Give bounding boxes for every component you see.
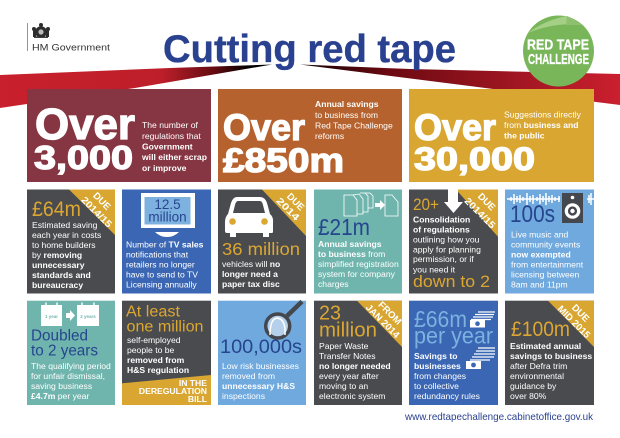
panel: over £850m savings — [218, 89, 402, 182]
icon: television: 12.5 — [154, 197, 181, 212]
panel: 12.5 million TV sales: Licensing annually — [126, 280, 197, 290]
panel: £64m home builders: bureaucracy — [32, 280, 83, 290]
panel: at least one million: people to be — [127, 345, 175, 355]
panel: £66m per year redundancy: businesses — [414, 361, 461, 371]
panel: over 3,000 regulations: will either scrap — [141, 152, 207, 162]
panel: 20+ consolidation of regulations: permission, or if — [413, 254, 474, 264]
panel: £66m per year redundancy: £66m — [414, 306, 467, 332]
panel: 100,000s low risk businesses: inspections — [222, 391, 265, 401]
badge: Red Tape Challenge: RED TAPE — [527, 36, 589, 54]
website URL: www.redtapechallenge.cabinetoffice.gov.uk — [404, 412, 594, 423]
panel: at least one million: removed from — [127, 355, 185, 365]
panel: £100m Defra guidance: guidance by — [510, 381, 557, 391]
icon: documents and arrow — [344, 193, 398, 216]
panel: 100s live music: 8am and 11pm — [511, 280, 568, 290]
panel: 23 million waste transfer notes: moving to an — [319, 381, 368, 391]
panel: over 3,000 regulations: Government — [142, 142, 193, 152]
panel: £64m home builders: £64m — [32, 198, 81, 221]
icon: down arrow — [444, 190, 463, 213]
panel: £100m Defra guidance: savings to business — [510, 351, 592, 361]
panel: 12.5 million TV sales: have to send to TV — [126, 270, 198, 280]
panel: doubled to 2 years — [27, 301, 115, 405]
panel: £100m Defra guidance: DUE — [569, 303, 592, 325]
panel: 36 million vehicles: paper tax disc — [222, 279, 280, 289]
panel: 12.5 million TV sales: Number of TV sales — [126, 240, 204, 250]
panel: 12.5 million TV sales: notifications that — [126, 250, 189, 260]
panel: £64m home builders: 2014/15 — [78, 195, 114, 231]
panel: £66m per year redundancy: per year — [414, 322, 493, 348]
panel: 20+ consolidation of regulations: DUE — [475, 191, 498, 214]
panel: £64m home builders: by removing — [32, 250, 82, 260]
panel: £64m home builders: each year in costs — [32, 230, 101, 240]
panel: 100s live music: 100s — [510, 201, 555, 228]
panel: over £850m savings: Over — [223, 107, 305, 148]
panel: 23 million waste transfer notes: JAN 2014 — [363, 302, 402, 341]
panel: over 3,000 regulations: The number of — [142, 120, 199, 130]
panel: 20+ consolidation of regulations: of regulations — [413, 224, 470, 234]
icon: television — [141, 193, 195, 237]
panel: at least one million: one million — [126, 319, 204, 336]
panel: at least one million: IN THE — [179, 378, 207, 388]
panel: over £850m savings: to business from — [315, 110, 378, 120]
panel: over 3,000 regulations: Over — [35, 100, 135, 149]
panel: £66m per year redundancy: Savings to — [414, 351, 457, 361]
panel: £21m registration: charges — [318, 279, 349, 289]
panel: over 30,000 suggestions: 30,000 — [414, 141, 535, 177]
HM Government logo: HM Government — [32, 42, 110, 52]
panel: doubled to 2 years: Doubled — [31, 328, 88, 345]
title: Cutting red tape — [163, 28, 456, 71]
panel: 23 million waste transfer notes: electronic system — [319, 391, 385, 401]
panel: over 30,000 suggestions — [409, 89, 594, 182]
panel: 20+ consolidation of regulations: apply for planning — [413, 244, 481, 254]
panel: over £850m savings: £850m — [223, 142, 344, 180]
panel: 23 million waste transfer notes: every year after — [319, 371, 379, 381]
panel: over £850m savings: reforms — [315, 131, 344, 141]
panel: 20+ consolidation of regulations: you need it — [413, 264, 456, 274]
panel: £64m home builders: unnecessary — [32, 260, 85, 270]
panel: over £850m savings: Red Tape Challenge — [315, 120, 393, 130]
panel: £100m Defra guidance — [505, 301, 594, 405]
panel: 23 million waste transfer notes — [314, 300, 403, 405]
panel: 100s live music: now exempted — [511, 250, 571, 260]
panel: at least one million: BILL — [188, 394, 207, 404]
HM Government logo — [27, 23, 110, 52]
panel: 20+ consolidation of regulations: down to 2 — [413, 272, 490, 291]
panel: over 30,000 suggestions: Suggestions directly — [504, 110, 582, 120]
badge: Red Tape Challenge — [523, 16, 594, 86]
icon: banknotes lower — [466, 348, 495, 369]
panel: 100,000s low risk businesses: unnecessary H&S — [222, 381, 295, 391]
panel: over 30,000 suggestions: the public — [504, 130, 545, 140]
icon: calendars and arrow: 2 years — [80, 314, 96, 319]
panel: 23 million waste transfer notes: no longer needed — [319, 361, 391, 371]
icon: calendars and arrow: 1 year — [45, 314, 58, 319]
panel: £100m Defra guidance: after Defra trim — [510, 361, 567, 371]
panel: £21m registration: simplified registration — [318, 259, 399, 269]
panel: over 30,000 suggestions: from business and — [504, 120, 578, 130]
panel: 36 million vehicles: DUE — [284, 191, 307, 214]
panel: £100m Defra guidance: Estimated annual — [510, 341, 581, 351]
panel: £64m home builders: DUE — [90, 191, 113, 213]
panel: over 3,000 regulations: 3,000 — [34, 139, 133, 176]
icon: magnifying glass — [266, 302, 302, 338]
panel: 23 million waste transfer notes: Transfer Notes — [319, 351, 376, 361]
panel: 100s live music: community events — [511, 240, 580, 250]
panel: 100,000s low risk businesses: removed from — [222, 371, 275, 381]
panel: £66m per year redundancy: to collective — [414, 381, 459, 391]
panel: over 3,000 regulations: regulations that — [142, 131, 201, 141]
icon: calendars and arrow — [41, 302, 99, 326]
panel: £64m home builders — [27, 190, 115, 294]
panel: 36 million vehicles — [218, 190, 307, 294]
panel: at least one million: self-employed — [127, 335, 181, 345]
panel: doubled to 2 years: to 2 years — [31, 343, 98, 360]
panel: £100m Defra guidance: £100m — [511, 318, 570, 341]
panel: over £850m savings: Annual savings — [315, 99, 379, 109]
panel: 20+ consolidation of regulations: 2014/15 — [462, 196, 498, 232]
panel: 36 million vehicles: 2014 — [274, 196, 302, 224]
panel: 20+ consolidation of regulations: outlining how you — [413, 234, 480, 244]
panel: £66m per year redundancy: redundancy rules — [414, 391, 480, 401]
panel: 20+ consolidation of regulations: 20+ — [413, 196, 439, 214]
panel: 20+ consolidation of regulations: Consolidation — [413, 214, 470, 224]
badge: Red Tape Challenge: CHALLENGE — [528, 51, 589, 68]
panel: £66m per year redundancy — [409, 301, 498, 405]
panel: 20+ consolidation of regulations — [409, 190, 498, 294]
panel: £21m registration — [314, 190, 402, 294]
icon: royal crest — [32, 23, 50, 38]
panel: at least one million: At least — [126, 304, 181, 321]
panel: £100m Defra guidance: MID 2015 — [555, 304, 592, 341]
panel: 100s live music: from entertainment — [511, 260, 584, 270]
panel: £64m home builders: standards and — [32, 270, 91, 280]
panel: doubled to 2 years: £4.7m per year — [31, 391, 89, 401]
panel: £21m registration: system for company — [318, 269, 396, 279]
icon: sound wave — [507, 193, 594, 205]
panel: 100,000s low risk businesses: 100,000s — [220, 336, 302, 358]
panel: over 3,000 regulations: or improve — [142, 163, 187, 173]
panel: 36 million vehicles: longer need a — [222, 269, 278, 279]
panel: 23 million waste transfer notes: million — [319, 320, 377, 342]
panel: at least one million: DEREGULATION — [139, 386, 207, 396]
panel: 100s live music — [505, 190, 594, 294]
icon: television: million — [148, 210, 187, 224]
panel: 23 million waste transfer notes: 23 — [319, 302, 341, 324]
icon: banknotes upper — [470, 312, 495, 328]
icon: speaker — [562, 193, 583, 223]
panel: £21m registration: to business from — [318, 249, 385, 259]
red tape ribbon — [0, 64, 620, 108]
panel: 23 million waste transfer notes: Paper Waste — [319, 341, 369, 351]
panel: at least one million: H&S regulation — [127, 365, 189, 375]
panel: 36 million vehicles: 36 million — [222, 239, 300, 259]
panel: 23 million waste transfer notes: FROM — [376, 300, 403, 327]
panel: over 3,000 regulations — [27, 89, 211, 182]
icon: car — [225, 197, 273, 237]
panel: 100,000s low risk businesses: Low risk businesses — [222, 361, 299, 371]
panel: at least one million — [122, 301, 211, 405]
panel: £100m Defra guidance: environmental — [510, 371, 564, 381]
panel: £21m registration: £21m — [318, 214, 370, 240]
panel: doubled to 2 years: for unfair dismissal, — [31, 371, 105, 381]
panel: doubled to 2 years: saving business — [31, 381, 92, 391]
panel: 100s live music: licensing between — [511, 270, 580, 280]
panel: £66m per year redundancy: from changes — [414, 371, 466, 381]
panel: 100,000s low risk businesses — [218, 301, 306, 405]
panel: £64m home builders: Estimated saving — [32, 220, 98, 230]
panel: 100s live music: Live music and — [511, 230, 569, 240]
panel: £64m home builders: to home builders — [32, 240, 96, 250]
panel: £100m Defra guidance: over 80% — [510, 391, 547, 401]
panel: 36 million vehicles: vehicles will no — [222, 259, 280, 269]
panel: doubled to 2 years: The qualifying period — [31, 361, 111, 371]
panel: 12.5 million TV sales: retailers no longer — [126, 260, 195, 270]
panel: over 30,000 suggestions: Over — [414, 107, 496, 148]
panel: 12.5 million TV sales — [122, 190, 211, 294]
panel: £21m registration: Annual savings — [318, 239, 382, 249]
